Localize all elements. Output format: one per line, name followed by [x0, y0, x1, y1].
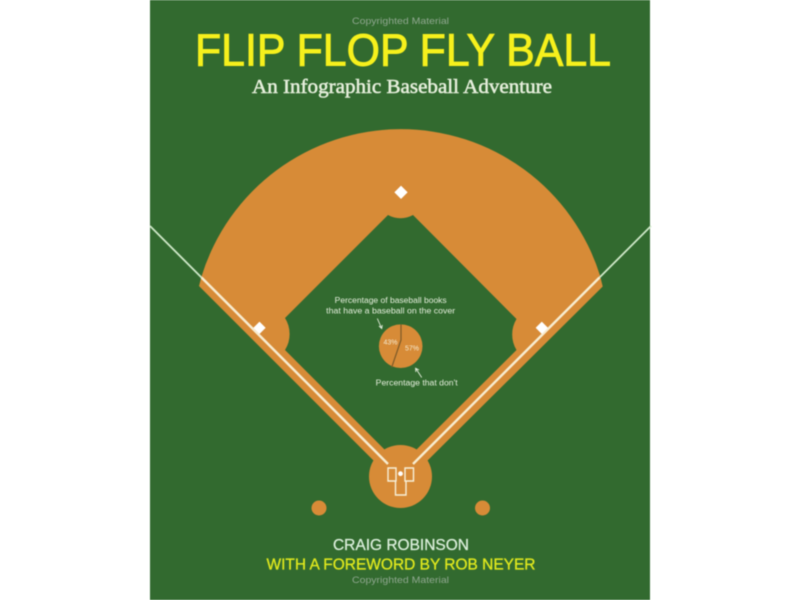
foreword credit: WITH A FOREWORD BY ROB NEYER: [266, 556, 536, 574]
label: percentage with a baseball: Percentage of baseball books: [335, 296, 447, 305]
arrow to 43 percent slice: [377, 318, 382, 328]
inner grass diamond: [285, 215, 516, 466]
copyright notice top: Copyrighted Material: [352, 16, 449, 27]
copyright notice bottom: Copyrighted Material: [352, 575, 449, 586]
subtitle: An Infographic Baseball Adventure: [252, 76, 552, 98]
title: FLIP FLOP FLY BALL: [195, 24, 611, 76]
pie slice divider: [392, 324, 401, 367]
right foul line outfield segment: [600, 226, 651, 278]
left on-deck circle: [312, 500, 326, 516]
infield dirt: [199, 129, 603, 467]
baseball diamond diagram: [150, 129, 651, 515]
first base: [536, 322, 547, 333]
home plate dirt circle: [369, 445, 432, 508]
pie chart with labels: [326, 296, 459, 388]
right foul line infield segment: [413, 278, 600, 464]
label: percentage that don't: Percentage that don't: [376, 378, 459, 388]
right on-deck circle: [475, 500, 490, 516]
pie circle: [379, 324, 423, 368]
third base: [254, 322, 265, 333]
home plate: [398, 471, 403, 476]
value 57 percent: 57%: [405, 346, 419, 352]
panel: green cover background: [150, 0, 650, 600]
label: that have a baseball on the cover: that have a baseball on the cover: [326, 306, 456, 316]
left foul line outfield segment: [150, 226, 202, 278]
second base: [395, 186, 407, 198]
left foul line infield segment: [202, 278, 388, 464]
batter's boxes and catcher's box: [388, 468, 414, 495]
value 43 percent: 43%: [383, 340, 398, 346]
author name: CRAIG ROBINSON: [333, 537, 469, 554]
arrow to 57 percent slice: [416, 368, 422, 378]
